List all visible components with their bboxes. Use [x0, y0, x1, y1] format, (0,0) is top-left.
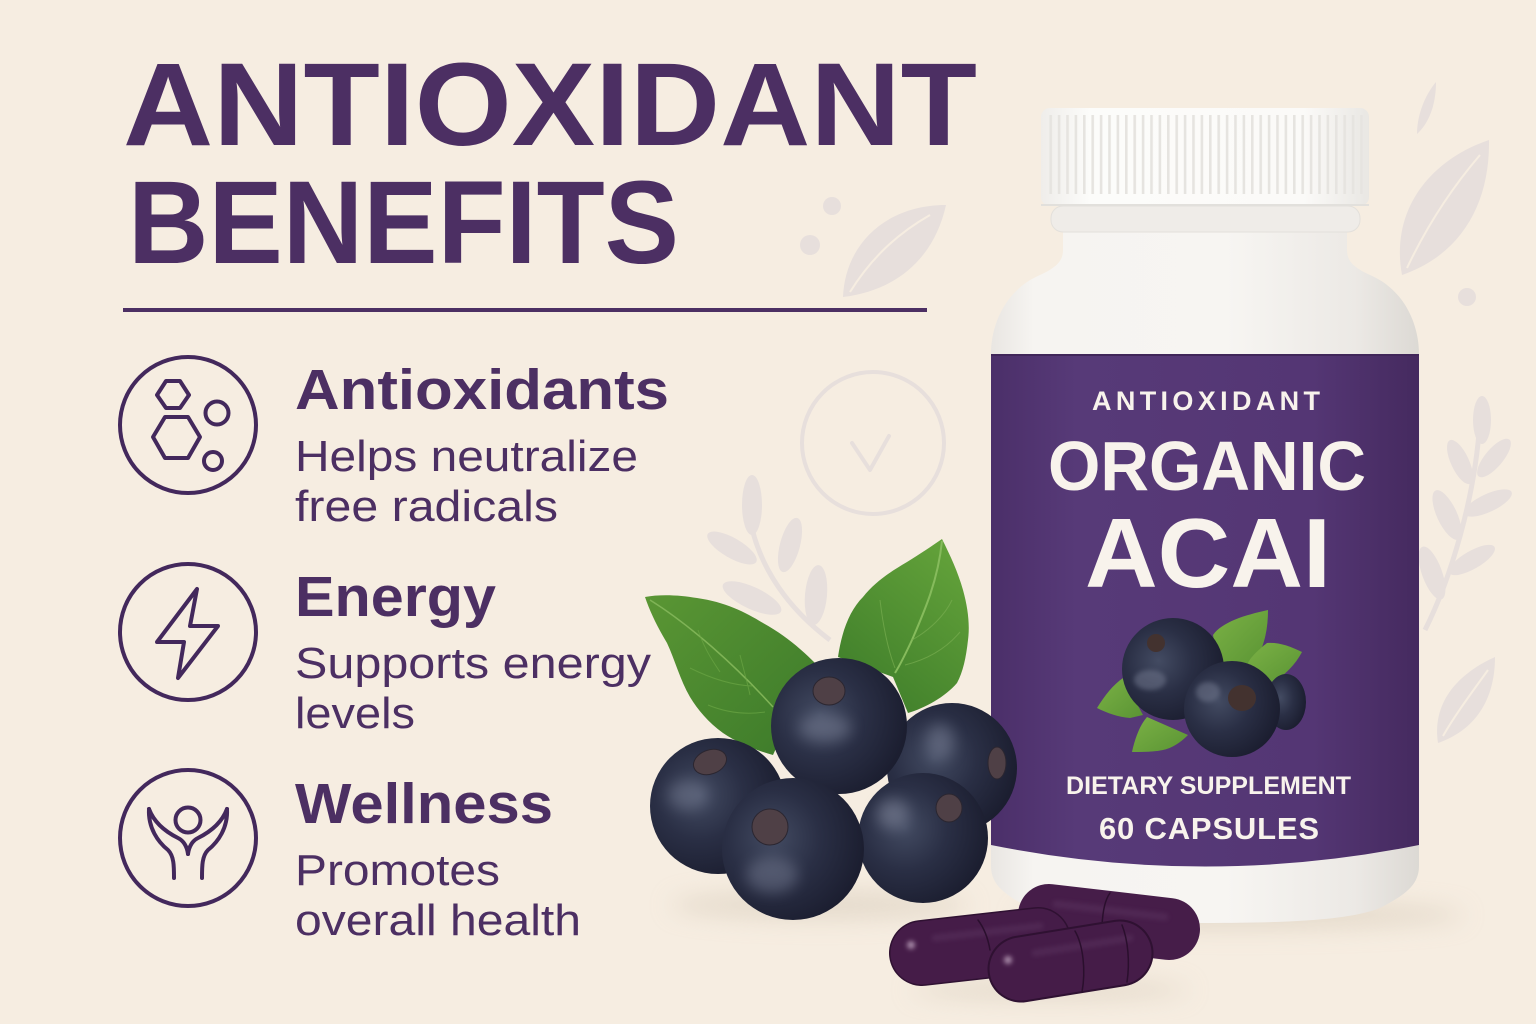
leaf: right	[838, 539, 969, 713]
label: antioxidant: ANTIOXIDANT	[1092, 386, 1320, 416]
capsule: left	[907, 920, 1040, 953]
shadow under bottle and berries	[670, 891, 1465, 1000]
label: acai: ACAI	[1085, 498, 1331, 608]
title divider	[123, 308, 927, 312]
decorative sprig: right	[1413, 396, 1516, 630]
capsules	[907, 893, 1169, 992]
title	[123, 39, 977, 289]
dots	[823, 197, 841, 215]
berry: front right	[858, 773, 988, 903]
icon: person with hands	[120, 770, 256, 906]
heading: Wellness	[295, 772, 553, 836]
benefit: antioxidants	[120, 357, 669, 531]
heading: Energy	[295, 565, 496, 629]
description: Supports energy	[295, 639, 651, 688]
description: overall health	[295, 896, 581, 945]
description: levels	[295, 689, 415, 738]
benefit: wellness	[120, 770, 581, 945]
capsule: front	[1004, 925, 1130, 992]
description	[295, 432, 638, 531]
leaf: small top right	[1417, 82, 1436, 134]
description: Promotes	[295, 846, 500, 895]
berry: front	[722, 778, 864, 920]
leaf: upper left of bottle	[843, 205, 946, 297]
title: ANTIOXIDANT	[123, 39, 977, 171]
label: 60 capsules: 60 CAPSULES	[1099, 811, 1319, 846]
acai berries cluster	[645, 539, 1017, 920]
label: organic: ORGANIC	[1048, 427, 1366, 505]
leaf: lower right	[1437, 657, 1495, 743]
decorative background leaves	[800, 82, 1495, 743]
leaf veins	[850, 155, 1488, 736]
cap	[1041, 108, 1369, 206]
decorative check circle	[802, 372, 944, 514]
berry: back right	[887, 703, 1017, 833]
description: Helps neutralize	[295, 432, 638, 481]
benefit: energy	[120, 564, 651, 738]
berry calyx marks	[690, 677, 1006, 845]
capsule: back	[1049, 893, 1169, 929]
leaf: left	[645, 595, 815, 755]
title: BENEFITS	[128, 157, 679, 289]
label: dietary supplement: DIETARY SUPPLEMENT	[1066, 772, 1351, 800]
heading: Antioxidants	[295, 358, 669, 422]
leaf: top right	[1400, 140, 1489, 275]
icon: molecules	[120, 357, 256, 493]
label art: berries and leaves	[1097, 610, 1306, 757]
description: free radicals	[295, 482, 558, 531]
decorative sprig: centre	[703, 475, 830, 640]
description	[295, 846, 581, 945]
description	[295, 639, 651, 738]
neck ring	[1051, 206, 1360, 232]
bottle	[991, 108, 1419, 923]
bottle body	[991, 232, 1419, 923]
label	[991, 354, 1419, 866]
icon: lightning bolt	[120, 564, 256, 700]
berry: left	[650, 738, 786, 874]
berry: top	[771, 658, 907, 794]
